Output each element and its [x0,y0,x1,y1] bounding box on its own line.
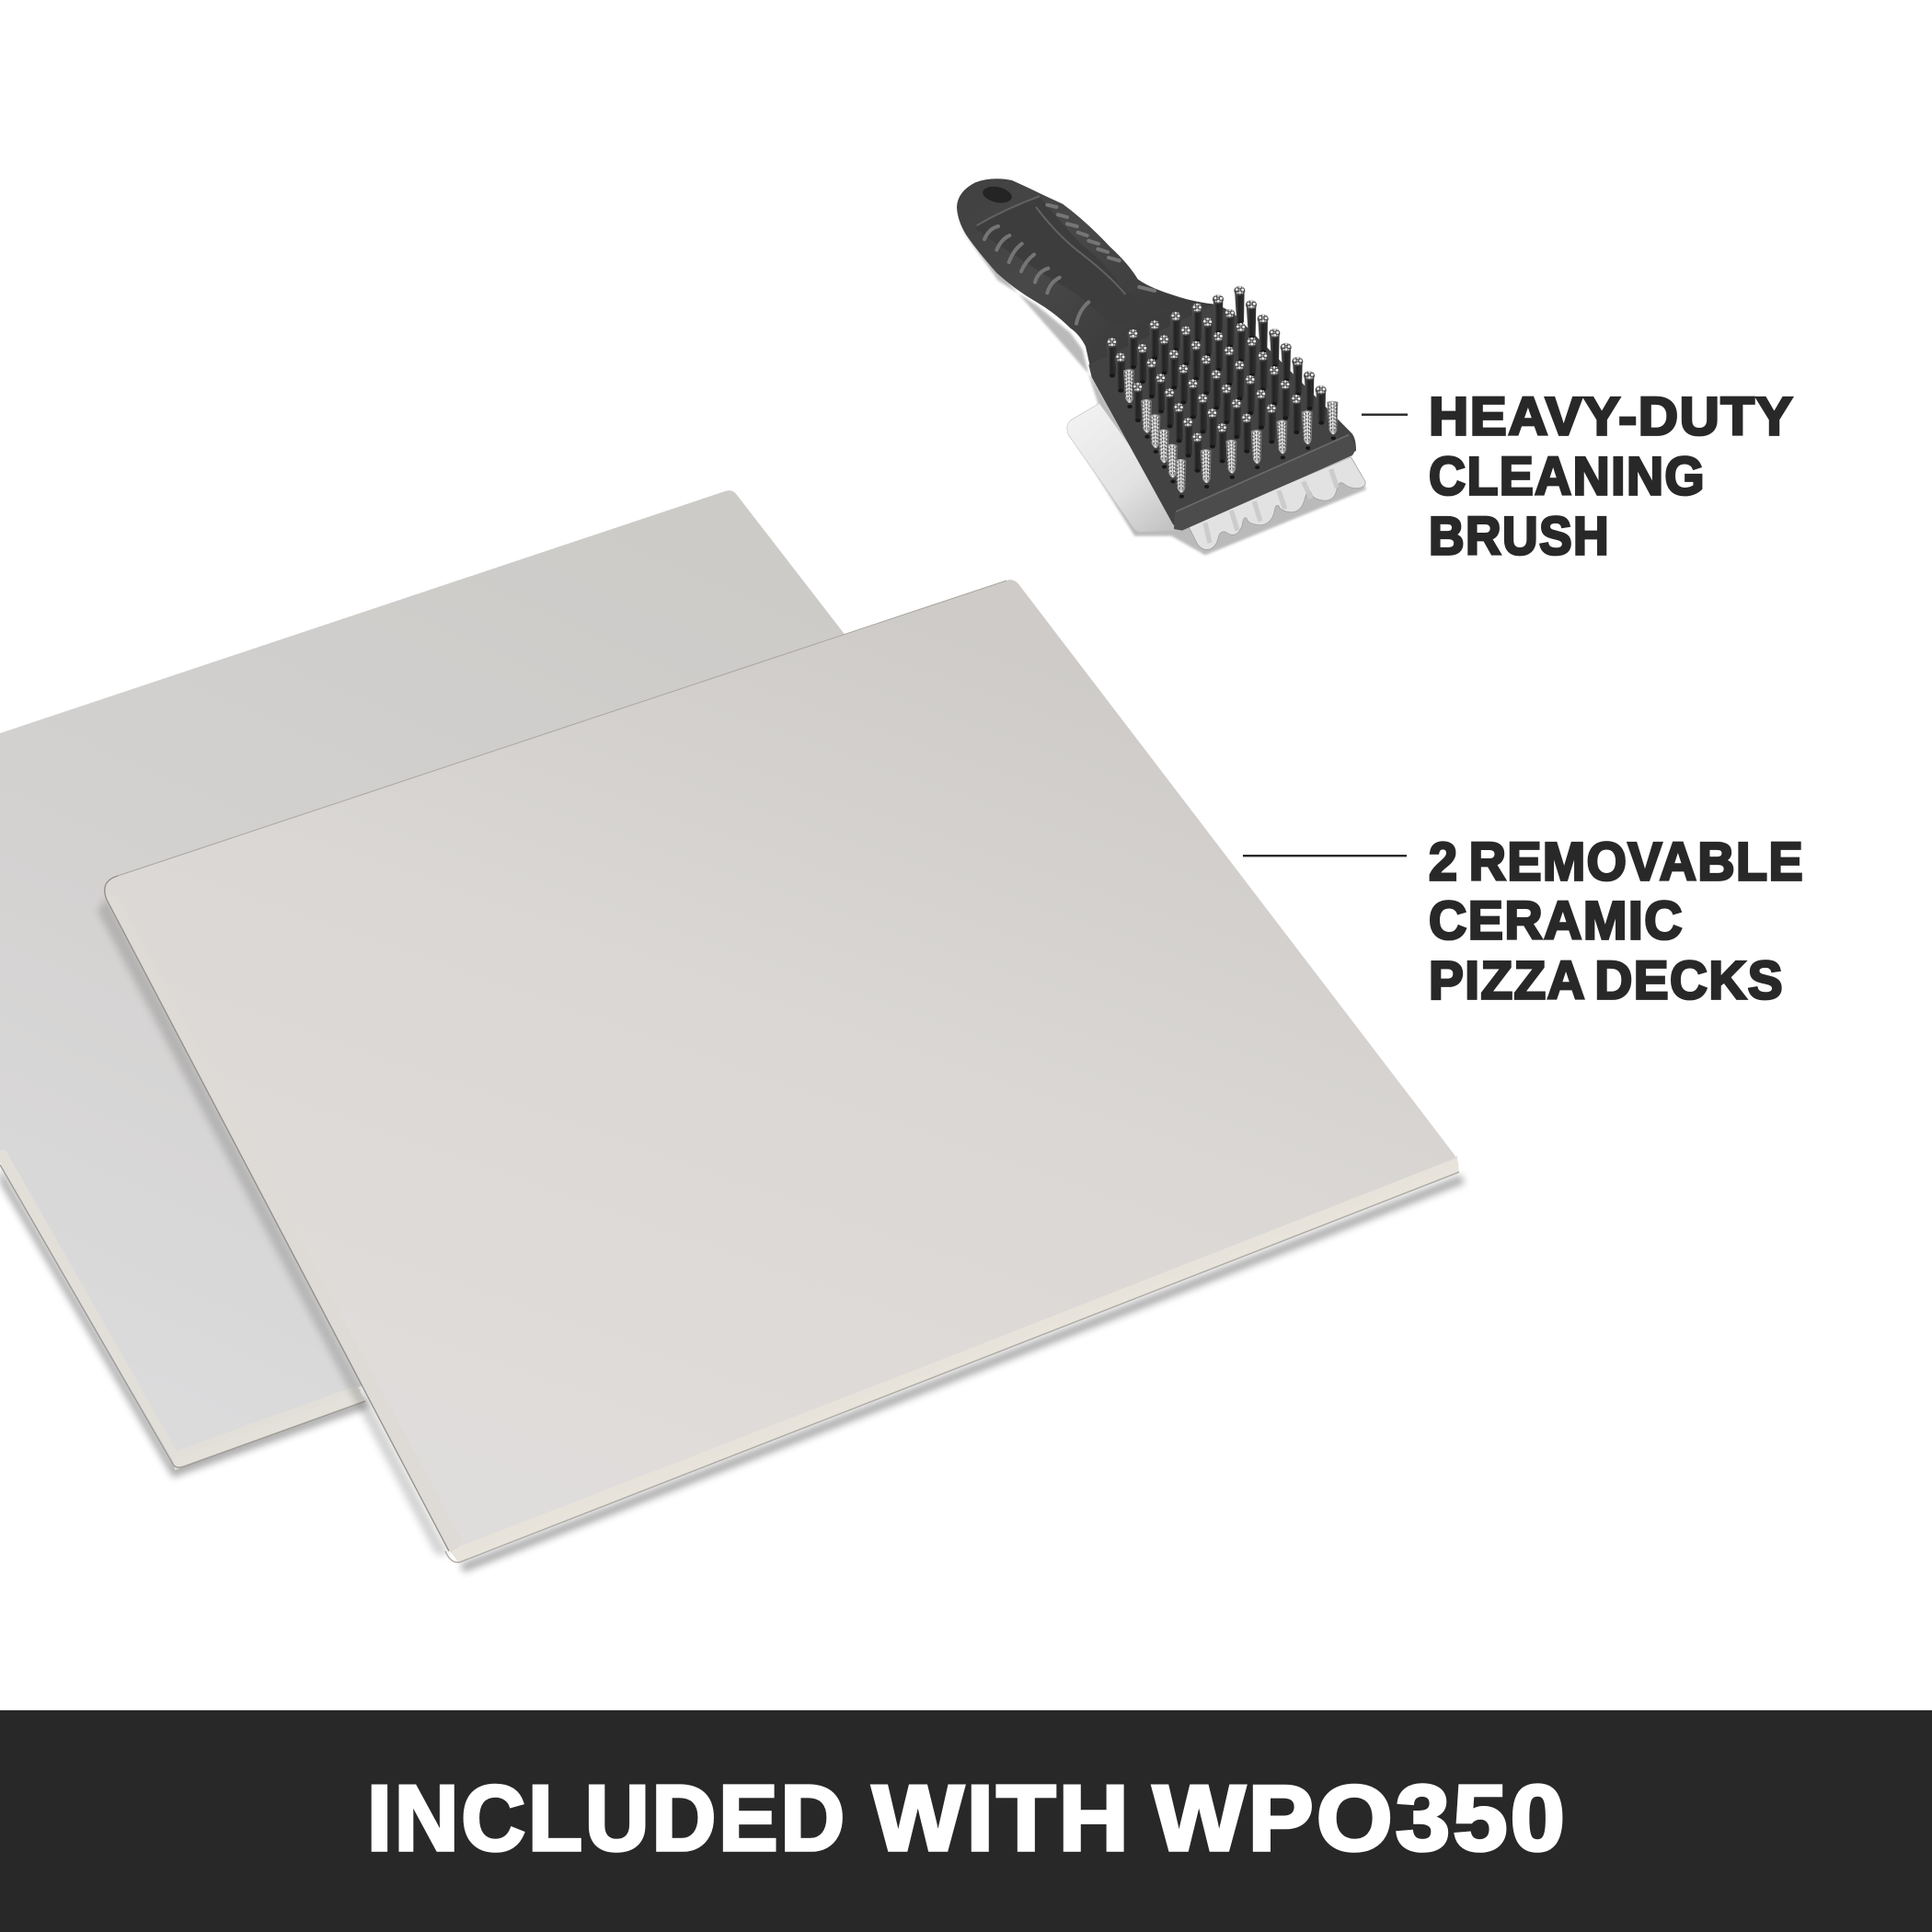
handle [957,178,1245,374]
footer title [367,1767,1568,1870]
brush head front lip [1174,434,1356,531]
wire bristle tufts [1106,286,1338,499]
front ceramic pizza deck [98,580,1465,1572]
label: heavy-duty cleaning brush: HEAVY-DUTY [1429,386,1794,447]
handle hanging hole [982,184,1013,205]
footer title: WPO350 [1153,1767,1568,1870]
left scraper blade [1067,403,1178,532]
footer band [0,1710,1932,1932]
label: heavy-duty cleaning brush: CLEANING [1429,447,1706,506]
icon: cleaning brush [957,178,1366,555]
label: heavy-duty cleaning brush: BRUSH [1429,506,1610,567]
brush head plate [1088,305,1356,529]
leader line: pizza decks [1243,855,1407,857]
back ceramic pizza deck [0,490,883,1478]
footer title: INCLUDED [367,1767,847,1870]
handle centre recess [975,196,1171,325]
leader line: cleaning brush [1362,414,1408,416]
label: 2 removable ceramic pizza decks: CERAMIC [1429,891,1684,951]
front scraper blade with scallops [1189,457,1365,549]
handle grip ridges [984,205,1155,324]
footer title: WITH [872,1767,1132,1870]
label: 2 removable ceramic pizza decks: PIZZA DECKS [1429,951,1784,1010]
label: 2 removable ceramic pizza decks [1429,832,1804,1010]
label: heavy-duty cleaning brush [1429,386,1794,567]
label: 2 removable ceramic pizza decks: 2 REMOVABLE [1429,832,1804,892]
brush drop shadow [960,227,1366,555]
